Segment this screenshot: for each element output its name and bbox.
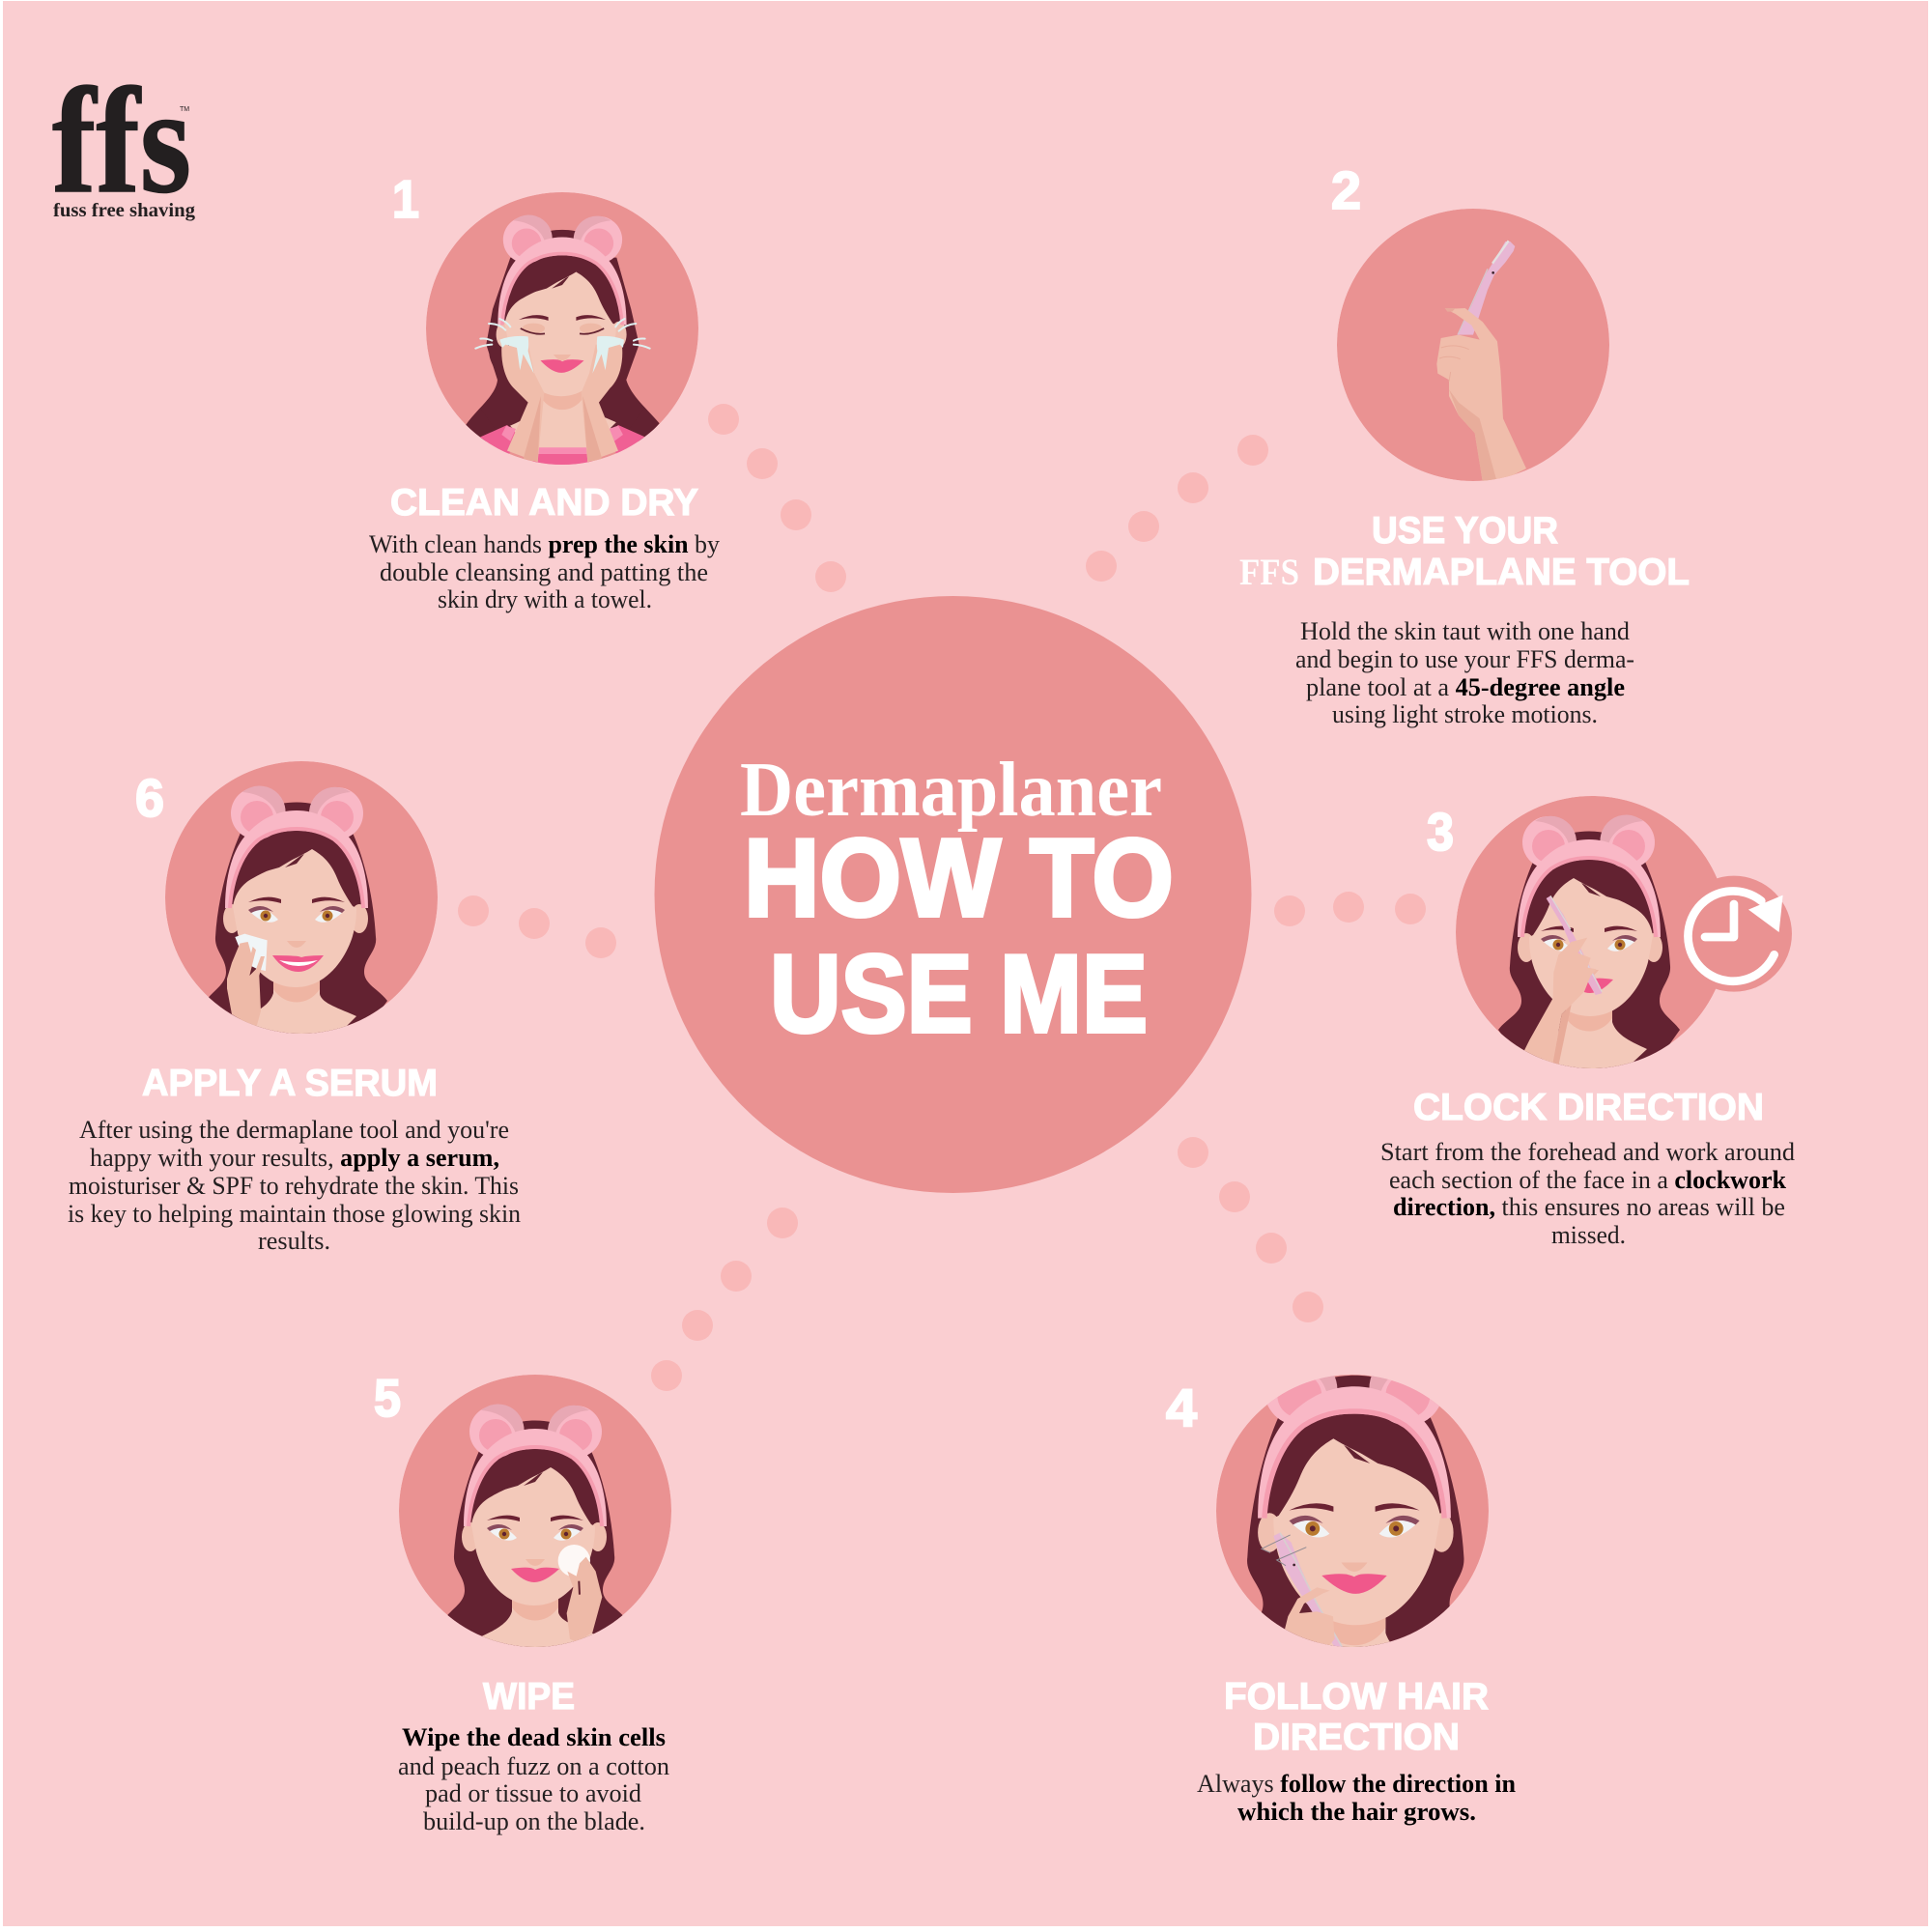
- body text: step 5: build-up on the blade.: [423, 1807, 645, 1835]
- body text: step 6: happy with your results, apply a serum,: [90, 1144, 499, 1172]
- body text: step 3: missed.: [1551, 1221, 1626, 1249]
- panel: step 3 clock direction: [1380, 796, 1795, 1249]
- logo: ffs fuss free shaving: TM: [180, 106, 189, 113]
- body text: step 4: which the hair grows.: [1237, 1798, 1476, 1826]
- heading: use your ffs dermaplane tool: FFS: [1239, 552, 1299, 593]
- body text: step 3: [1380, 1138, 1795, 1249]
- body text: step 5: [398, 1723, 669, 1835]
- number 2: 2: [1331, 160, 1361, 220]
- heading: use your ffs dermaplane tool: DERMAPLANE TOOL: [1313, 552, 1690, 593]
- number 3: 3: [1427, 802, 1454, 862]
- icon: clock with clockwise arrow: [1676, 876, 1792, 992]
- heading: follow hair direction: FOLLOW HAIR: [1224, 1676, 1489, 1718]
- illustration: close-up woman using tool on cheek: [1216, 1375, 1489, 1647]
- title: HOW TO: HOW TO: [744, 817, 1174, 940]
- panel: step 5 wipe: [374, 1368, 671, 1835]
- body text: step 1: With clean hands prep the skin by: [369, 530, 720, 558]
- illustration: woman using tool on forehead: [1456, 796, 1728, 1076]
- body text: step 6: moisturiser & SPF to rehydrate the skin. This: [69, 1172, 519, 1200]
- body text: step 5: pad or tissue to avoid: [425, 1779, 641, 1807]
- illustration: woman applying serum with pad: [165, 761, 438, 1047]
- panel: step 1 clean and dry: [369, 169, 720, 613]
- body text: step 2: plane tool at a 45-degree angle: [1306, 673, 1625, 701]
- title: Dermaplaner: Dermaplaner: [740, 748, 1162, 833]
- body text: step 5: and peach fuzz on a cotton: [398, 1752, 669, 1780]
- logo: ffs fuss free shaving: fuss free shaving: [53, 200, 195, 221]
- body text: step 4: [1197, 1770, 1517, 1826]
- body text: step 5: Wipe the dead skin cells: [402, 1723, 666, 1751]
- heading: follow hair direction: [1224, 1676, 1489, 1758]
- body text: step 3: each section of the face in a clockwork: [1389, 1166, 1787, 1194]
- panel: step 4 follow hair direction: [1166, 1353, 1517, 1826]
- body text: step 3: Start from the forehead and work around: [1380, 1138, 1795, 1166]
- number 5: 5: [374, 1368, 401, 1428]
- body text: step 3: direction, this ensures no areas will be: [1393, 1193, 1785, 1221]
- heading: use your ffs dermaplane tool: USE YOUR: [1372, 510, 1558, 552]
- heading: wipe: WIPE: [483, 1676, 575, 1718]
- body text: step 2: [1295, 617, 1634, 728]
- illustration: woman washing face: [426, 192, 698, 473]
- connector dots: [458, 404, 1426, 1391]
- heading: apply a serum: APPLY A SERUM: [142, 1063, 438, 1104]
- body text: step 1: skin dry with a towel.: [438, 585, 652, 613]
- heading: follow hair direction: DIRECTION: [1253, 1717, 1460, 1758]
- body text: step 1: double cleansing and patting the: [380, 558, 708, 586]
- number 6: 6: [135, 768, 164, 828]
- panel: step 2 use your tool: [1239, 160, 1690, 728]
- body text: step 4: Always follow the direction in: [1197, 1770, 1517, 1798]
- number 1: 1: [392, 169, 419, 229]
- body text: step 6: is key to helping maintain those glowing skin: [68, 1200, 521, 1228]
- body text: step 2: and begin to use your FFS derma-: [1295, 645, 1634, 673]
- illustration: hand holding dermaplane tool: [1337, 209, 1609, 483]
- body text: step 2: Hold the skin taut with one hand: [1300, 617, 1630, 645]
- body text: step 2: using light stroke motions.: [1332, 700, 1598, 728]
- panel: step 6 apply a serum: [68, 761, 521, 1255]
- heading: clean and dry: CLEAN AND DRY: [390, 482, 698, 524]
- number 4: 4: [1166, 1378, 1197, 1437]
- body text: step 6: After using the dermaplane tool and you're: [79, 1116, 509, 1144]
- center circle with title: [655, 596, 1252, 1193]
- heading: use your ffs dermaplane tool: [1239, 510, 1690, 593]
- illustration: woman wiping with cotton pad: [399, 1375, 671, 1665]
- body text: step 1: [369, 530, 720, 613]
- heading: clock direction: CLOCK DIRECTION: [1413, 1087, 1764, 1128]
- body text: step 6: results.: [258, 1227, 330, 1255]
- logo: ffs fuss free shaving: ffs: [52, 57, 191, 224]
- body text: step 6: [68, 1116, 521, 1255]
- title: USE ME: USE ME: [770, 933, 1148, 1056]
